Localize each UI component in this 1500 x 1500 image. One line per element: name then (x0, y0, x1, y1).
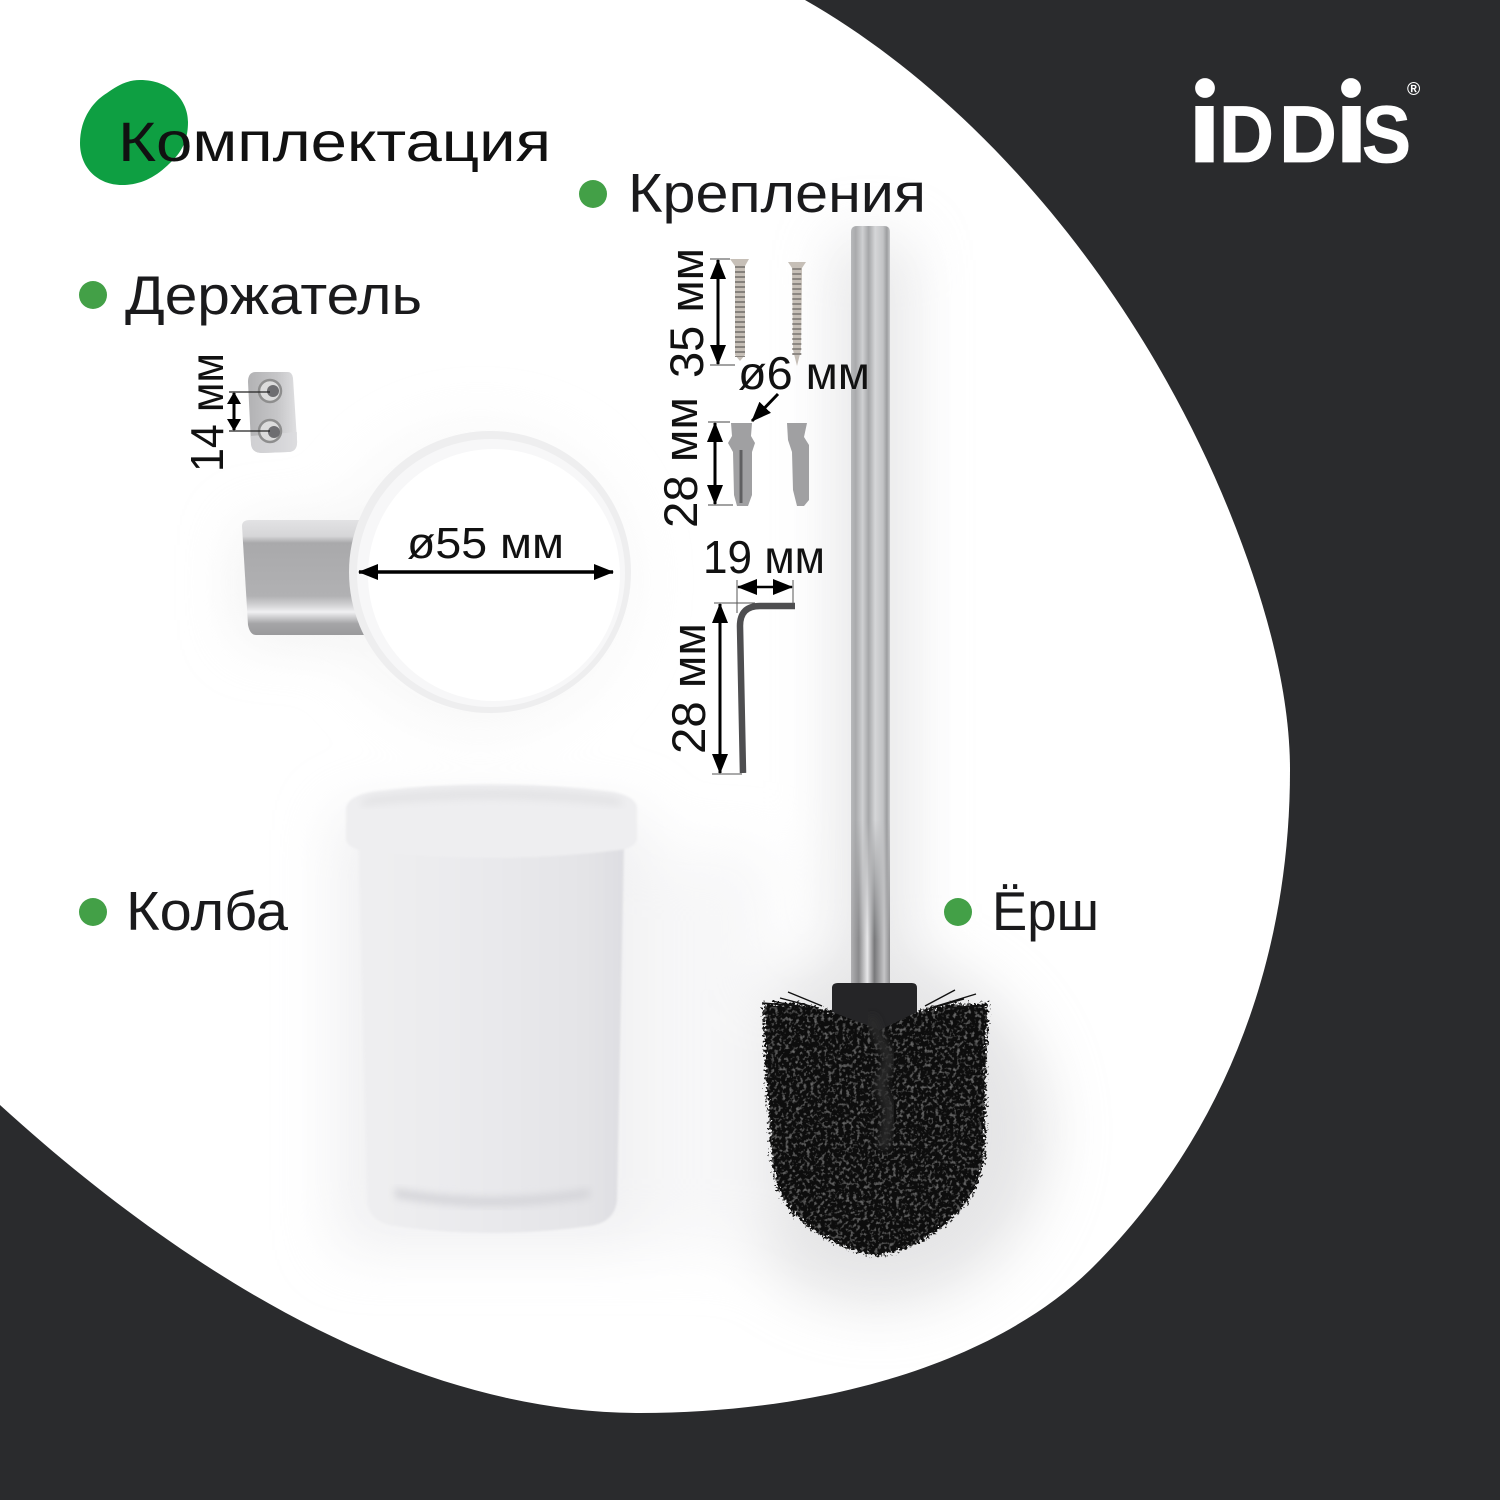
screw 2 (788, 262, 806, 366)
holder: ring with steel bracket: ø55 мм (407, 519, 564, 568)
title with green blob (80, 80, 551, 185)
bristle head (763, 1003, 988, 1256)
screws with 35 mm dimension (660, 248, 806, 378)
wall plugs with dimensions (654, 347, 870, 528)
black cap (832, 983, 917, 1030)
stray bristles (762, 990, 988, 1010)
logo: iDDIS (1188, 78, 1420, 180)
logo: iDDIS: ® (1407, 79, 1420, 99)
section label: Колба: Колба (126, 880, 288, 942)
hex key with dimensions: 19 мм (703, 531, 825, 583)
toilet brush (762, 226, 988, 1256)
heading: Комплектация: Комплектация (118, 110, 551, 173)
plug 2 (787, 423, 809, 506)
cup body (358, 845, 624, 1233)
screw 1 (730, 259, 749, 361)
logo: iDDIS: D (1279, 90, 1337, 180)
hex key with dimensions (662, 531, 825, 774)
rod (851, 226, 890, 990)
holder: ring with steel bracket (242, 431, 631, 713)
screws with 35 mm dimension: 35 мм (660, 248, 713, 378)
section label: Крепления: Крепления (628, 162, 926, 224)
dimension: 55 mm (359, 570, 613, 574)
glass cup (346, 784, 637, 1233)
steel bracket (242, 520, 372, 635)
logo: iDDIS: S (1362, 90, 1411, 180)
wall plugs with dimensions: 28 мм (654, 397, 707, 528)
icon: green blob (80, 80, 188, 185)
logo: iDDIS: D (1219, 90, 1274, 180)
cup rim (346, 784, 637, 858)
section label: Ёрш: Ёрш (992, 880, 1099, 942)
wall plugs with dimensions: ø6 мм (738, 347, 870, 399)
mounting plate with 14 mm dimension: 14 мм (181, 353, 233, 472)
twisted core (872, 1020, 890, 1145)
mounting plate with 14 mm dimension (181, 353, 297, 472)
logo: iDDIS: I (1188, 90, 1221, 180)
hex key with dimensions: 28 мм (662, 623, 715, 754)
plug 1 (728, 423, 755, 506)
soft product shadows (240, 240, 1048, 1305)
section label: Держатель: Держатель (125, 264, 422, 326)
section label: Ёрш (944, 880, 1099, 942)
white ring (349, 431, 631, 713)
logo: iDDIS: I (1335, 90, 1368, 180)
